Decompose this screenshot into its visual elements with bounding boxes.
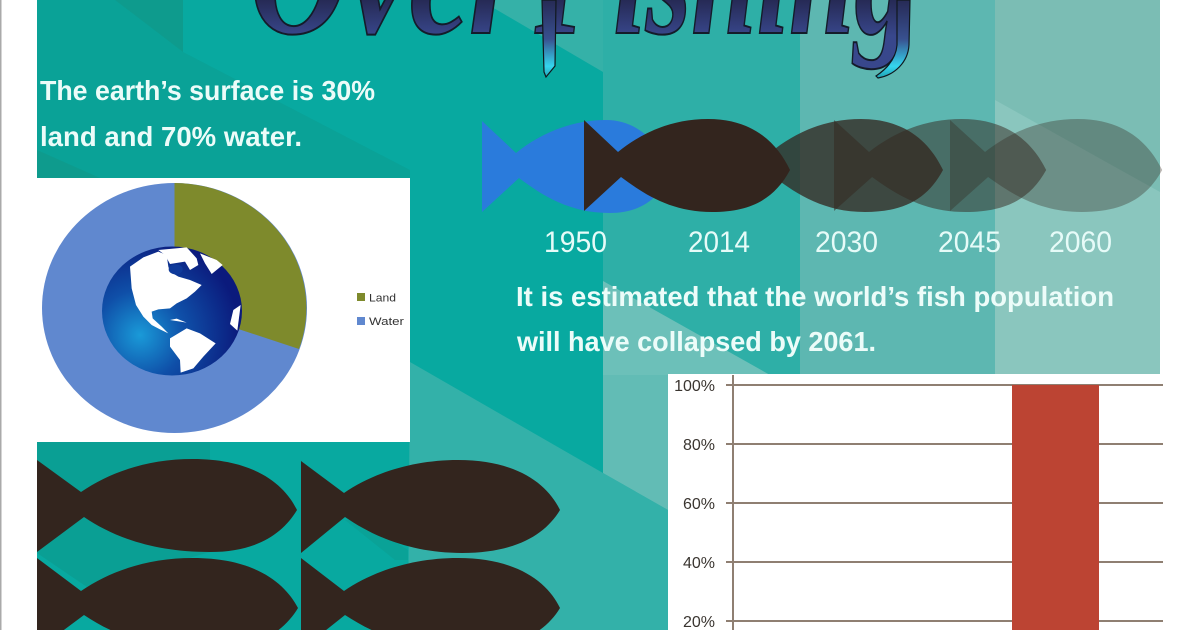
text: earth's surface: land and 70% water. — [40, 121, 302, 152]
donut: land segment — [174, 183, 306, 349]
bar — [1012, 385, 1099, 630]
fish row 1 right — [301, 460, 560, 553]
year labels: 2045 — [938, 226, 1001, 259]
fish 2060 — [950, 119, 1162, 212]
year labels: 2030 — [815, 226, 878, 259]
fish timeline — [482, 119, 1162, 213]
legend: Land — [369, 292, 396, 304]
bar chart — [668, 374, 1165, 630]
axis labels: 60% — [683, 496, 715, 513]
fish 2014 — [584, 119, 790, 212]
legend — [357, 292, 404, 328]
text: collapse estimate: It is estimated that the world’s fish population — [516, 281, 1114, 312]
axis labels: 100% — [674, 378, 715, 395]
fish row 2 left — [37, 558, 298, 630]
fish 2030 — [776, 119, 943, 212]
text: collapse estimate: will have collapsed by 2061. — [516, 326, 876, 357]
fish row 1 left — [37, 459, 297, 552]
axis labels: 40% — [683, 555, 715, 572]
text: earth's surface — [40, 75, 375, 152]
fish 1950 — [482, 120, 672, 213]
fish 2045 — [834, 119, 1046, 212]
title — [250, 0, 913, 78]
fish grid — [37, 459, 560, 630]
fish row 2 right — [301, 558, 560, 630]
year labels — [544, 226, 1112, 259]
text: collapse estimate — [516, 281, 1114, 357]
year labels: 2060 — [1049, 226, 1112, 259]
icon: globe — [102, 246, 242, 376]
text: earth's surface: The earth’s surface is 30% — [40, 75, 375, 106]
donut: water segment — [42, 183, 307, 433]
axis labels — [674, 378, 715, 630]
donut chart panel — [37, 178, 410, 442]
legend: Water — [369, 316, 404, 328]
axis labels: 80% — [683, 437, 715, 454]
year labels: 2014 — [688, 226, 750, 259]
year labels: 1950 — [544, 226, 607, 259]
